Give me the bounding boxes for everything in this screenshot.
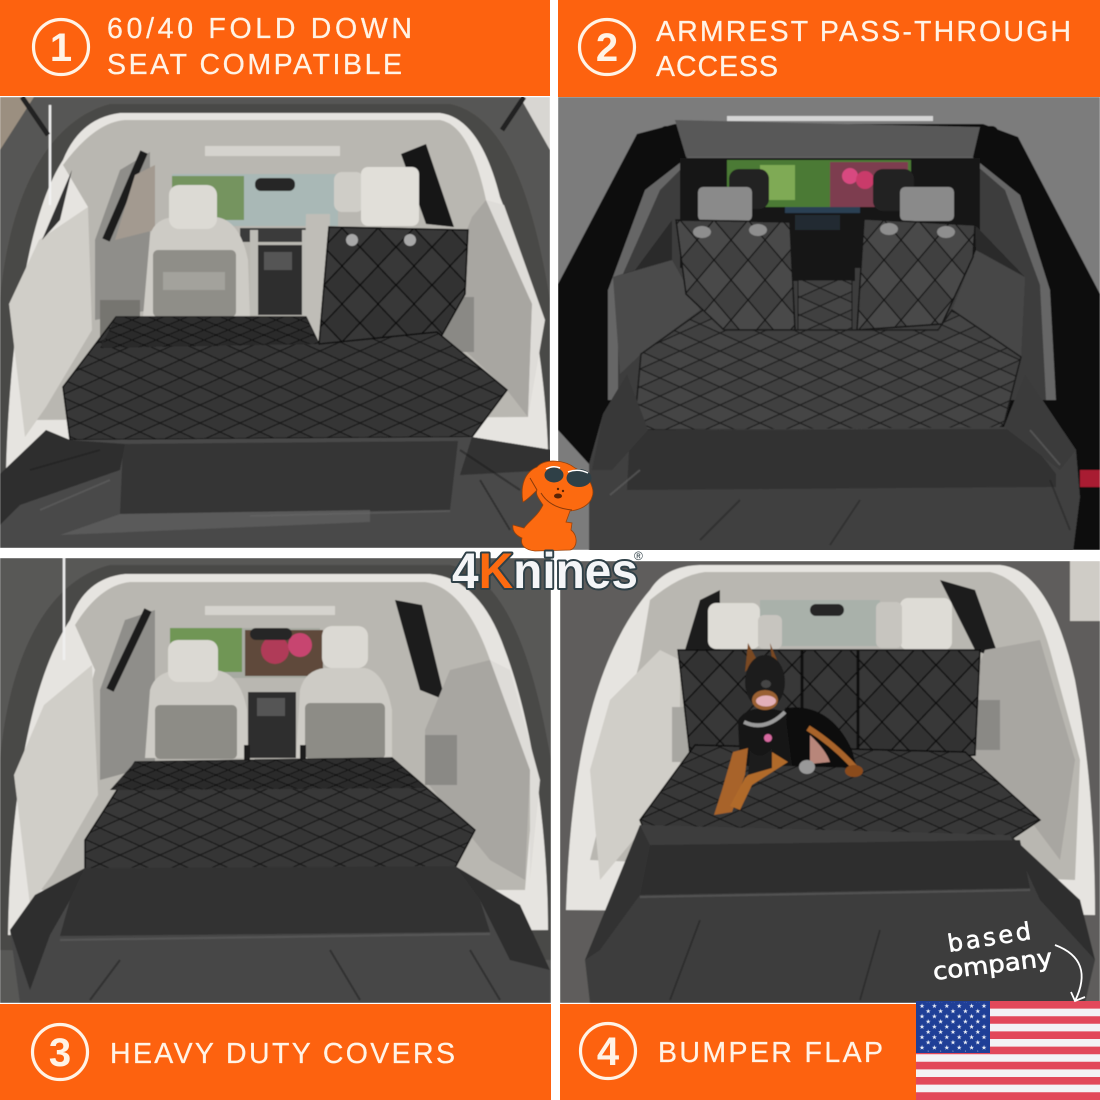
banner 4 bbox=[560, 1004, 916, 1100]
quilted back wall bbox=[678, 650, 980, 765]
banner 4: 4 bbox=[597, 1030, 620, 1074]
quilted seat cover right bbox=[857, 219, 975, 330]
bumper flap 3 bbox=[10, 866, 550, 1003]
handwritten note: based company: based bbox=[946, 917, 1033, 958]
quilted cover on folded seat bbox=[319, 227, 468, 344]
panel 2: armrest pass-through bbox=[558, 0, 1100, 552]
banner 4: BUMPER FLAP bbox=[658, 1037, 883, 1069]
banner 2: ACCESS bbox=[656, 51, 778, 83]
banner 2 bbox=[558, 0, 1100, 97]
arrow to flag bbox=[1055, 945, 1085, 1001]
panel 3: heavy duty covers bbox=[0, 558, 551, 1100]
panel 4: bumper flap bbox=[560, 561, 1100, 1100]
dog bbox=[714, 643, 863, 815]
wordmark: 4Knines bbox=[452, 543, 638, 599]
quilted seat cover left bbox=[676, 220, 795, 330]
armrest pass-through flap bbox=[798, 280, 852, 332]
logo: 4Knines dog mascot and wordmark bbox=[452, 461, 643, 599]
banner 2: 2 bbox=[596, 26, 618, 70]
quilted floor liner 4 bbox=[640, 745, 1040, 845]
bumper flap 4 bbox=[585, 825, 1095, 1003]
banner 1: 1 bbox=[50, 26, 72, 70]
banner 1 bbox=[0, 0, 550, 96]
registered mark: ® bbox=[634, 549, 643, 563]
icon: orange dog mascot bbox=[513, 461, 593, 551]
quilted floor liner 3 bbox=[85, 758, 475, 870]
photo 4: doberman sitting on liner bbox=[560, 561, 1100, 1003]
handwritten note: based company bbox=[931, 917, 1054, 986]
photo 3: trunk with both seats up bbox=[0, 558, 551, 1003]
banner 3: HEAVY DUTY COVERS bbox=[110, 1038, 455, 1070]
photo 1: SUV trunk with one seat folded bbox=[0, 97, 552, 548]
quilted floor liner 1 bbox=[63, 317, 507, 440]
photo 2: trunk against grey background bbox=[558, 97, 1100, 552]
banner 1: 60/40 FOLD DOWN bbox=[107, 13, 412, 45]
banner 3: 3 bbox=[49, 1031, 71, 1075]
banner 2: ARMREST PASS-THROUGH bbox=[656, 16, 1071, 48]
banner 3 bbox=[0, 1004, 551, 1100]
quilted floor liner 2 bbox=[634, 310, 1021, 430]
handwritten note: based company: company bbox=[931, 944, 1054, 986]
icon: US flag bbox=[916, 1001, 1100, 1100]
banner 1: SEAT COMPATIBLE bbox=[107, 49, 402, 81]
bumper flap 1 bbox=[0, 430, 552, 548]
panel 1: 60/40 fold down seat bbox=[0, 0, 552, 548]
bumper flap 2 bbox=[589, 374, 1080, 552]
